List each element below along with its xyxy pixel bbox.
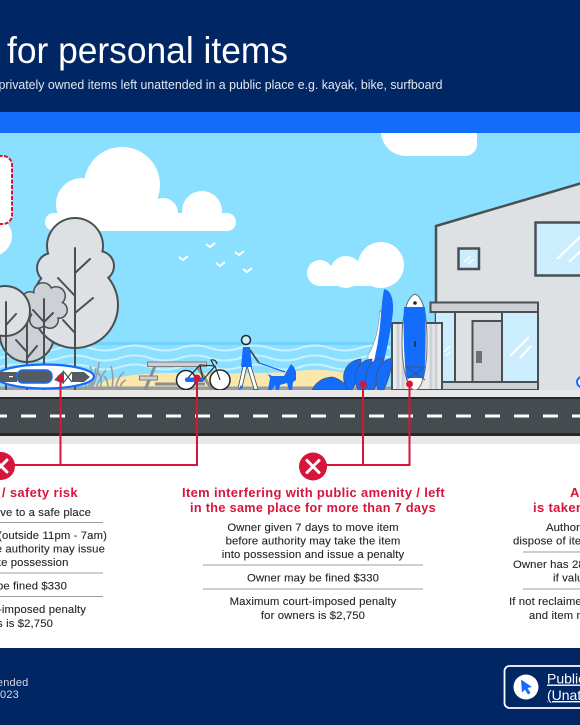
footer note bbox=[0, 677, 28, 701]
tree: left bbox=[0, 286, 30, 390]
centre body: into possession and issue a penalty bbox=[222, 549, 405, 561]
centre body bbox=[222, 522, 405, 622]
white lower panel bbox=[0, 444, 580, 648]
link button bbox=[504, 666, 580, 708]
grass bbox=[84, 362, 126, 388]
right dividers bbox=[523, 552, 580, 589]
centre body: Maximum court-imposed penalty bbox=[230, 596, 397, 608]
dog bbox=[264, 364, 296, 390]
left body: (outside 11pm - 7am) bbox=[0, 530, 107, 542]
house wall bbox=[436, 183, 580, 392]
icon: centre cross bbox=[299, 452, 327, 480]
right heading bbox=[533, 485, 580, 515]
marker dots bbox=[57, 374, 413, 388]
icon: cursor bbox=[514, 674, 538, 700]
person walking dog bbox=[238, 336, 285, 390]
footer band bbox=[0, 648, 580, 725]
header band bbox=[0, 0, 580, 112]
left heading: / safety risk bbox=[2, 485, 78, 500]
tree: big bbox=[31, 217, 119, 390]
large window bbox=[536, 222, 580, 276]
sand bbox=[90, 370, 395, 388]
centre body: Owner given 7 days to move item bbox=[227, 522, 399, 534]
leaning surfboard bbox=[368, 289, 393, 375]
subtitle: privately owned items left unattended in a public place e.g. kayak, bike, surfboard bbox=[0, 77, 442, 92]
centre column bbox=[182, 485, 445, 622]
right body bbox=[509, 522, 580, 622]
right column bbox=[509, 485, 580, 622]
birds bbox=[179, 243, 252, 272]
left body bbox=[0, 507, 107, 630]
ground strip bbox=[0, 386, 395, 390]
sky bbox=[0, 133, 580, 393]
link text bbox=[547, 670, 580, 703]
left dividers bbox=[0, 522, 103, 596]
centre dividers bbox=[203, 565, 423, 589]
centre heading: in the same place for more than 7 days bbox=[190, 500, 436, 515]
centre heading: Item interfering with public amenity / left bbox=[182, 485, 445, 500]
centre body: before authority may take the item bbox=[226, 536, 400, 548]
porch bbox=[430, 302, 538, 390]
connector lines bbox=[10, 378, 410, 465]
blue bar bbox=[0, 112, 580, 133]
kayak bbox=[0, 364, 94, 388]
title: for personal items bbox=[7, 30, 288, 71]
icon: left cross bbox=[0, 452, 15, 480]
sea bbox=[0, 342, 395, 387]
tree: bumpy bbox=[21, 282, 68, 390]
centre heading bbox=[182, 485, 445, 515]
picnic table bbox=[140, 362, 212, 390]
stacked kayaks bbox=[312, 358, 392, 390]
partial item at right edge bbox=[577, 374, 580, 390]
centre body: for owners is $2,750 bbox=[261, 610, 365, 622]
paddleboard bbox=[402, 294, 427, 390]
storage box bbox=[392, 323, 442, 390]
pavement and road bbox=[0, 390, 580, 444]
cloud: small right bbox=[307, 242, 404, 288]
bicycle bbox=[176, 360, 230, 390]
cloud: left bbox=[0, 216, 12, 256]
small window bbox=[458, 248, 479, 269]
left column bbox=[0, 485, 107, 630]
cloud: top bbox=[381, 133, 477, 156]
dashed callout box bbox=[0, 156, 12, 224]
tree: low round bbox=[0, 308, 54, 390]
cloud: large bbox=[45, 147, 236, 231]
centre body: Owner may be fined $330 bbox=[247, 572, 379, 584]
